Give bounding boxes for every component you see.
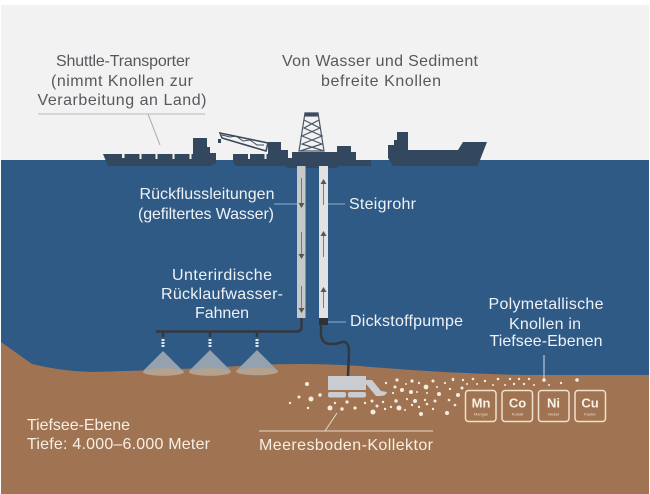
ship: right vessel xyxy=(388,132,487,166)
element: Co: Kobalt xyxy=(512,412,524,416)
element: Co xyxy=(502,390,532,422)
element: Co: Co xyxy=(509,396,526,410)
element: Cu: Cu xyxy=(581,396,599,410)
ship: shuttle transporter xyxy=(103,138,216,166)
label: freed nodules: befreite Knollen xyxy=(321,73,441,90)
plume 1 xyxy=(143,339,184,376)
label: plumes: Rücklaufwasser- xyxy=(161,286,283,303)
label: freed nodules: Von Wasser und Sediment xyxy=(282,53,479,70)
label: shuttle transporter xyxy=(38,53,206,145)
element: Mn: Mn xyxy=(472,396,490,410)
label: plumes: Fahnen xyxy=(195,305,249,322)
element: Ni: Ni xyxy=(547,396,560,410)
discharge manifold xyxy=(156,318,302,337)
crane xyxy=(218,133,268,151)
label: polymetallic nodules: Knollen in xyxy=(509,316,581,333)
label: plumes xyxy=(161,267,283,322)
slurry hose xyxy=(321,325,349,376)
label: polymetallic nodules: Tiefsee-Ebenen xyxy=(490,333,602,350)
element: Mn: Mangan xyxy=(474,412,488,416)
label: return lines: (gefiltertes Wasser) xyxy=(138,206,274,223)
platform hull xyxy=(233,142,371,168)
derrick xyxy=(299,113,324,151)
plume 2 xyxy=(189,339,231,376)
label: polymetallic nodules: Polymetallische xyxy=(488,296,604,313)
label: abyssal plain: Tiefe: 4.000–6.000 Meter xyxy=(27,436,211,453)
platform deck notches xyxy=(248,154,266,159)
return pipe xyxy=(297,166,306,318)
seabed collector xyxy=(328,376,387,398)
label: seabed collector xyxy=(259,413,434,454)
sky background xyxy=(1,5,649,165)
label: return lines xyxy=(138,186,297,223)
seabed xyxy=(1,342,649,494)
label: freed nodules xyxy=(282,53,479,90)
label: shuttle transporter: (nimmt Knollen zur xyxy=(51,73,194,90)
label: return lines: Rückflussleitungen xyxy=(140,186,274,203)
label: abyssal plain xyxy=(27,417,211,453)
label: riser: Steigrohr xyxy=(349,196,417,213)
label: plumes: Unterirdische xyxy=(172,267,272,284)
label: seabed collector: Meeresboden-Kollektor xyxy=(259,437,434,454)
label: shuttle transporter: Shuttle-Transporter xyxy=(56,53,191,70)
element: Cu xyxy=(575,390,606,422)
sea xyxy=(1,160,649,385)
label: polymetallic nodules xyxy=(488,296,604,381)
riser pipe xyxy=(319,166,328,325)
label: abyssal plain: Tiefsee-Ebene xyxy=(27,417,130,434)
label: shuttle transporter: Verarbeitung an Land) xyxy=(38,92,206,109)
plume 3 xyxy=(236,339,278,375)
element: Cu: Kupfer xyxy=(584,412,597,416)
element: Ni: Nickel xyxy=(548,412,559,416)
element: Mn xyxy=(466,390,496,422)
element: Ni xyxy=(538,390,569,422)
label: slurry pump: Dickstoffpumpe xyxy=(350,313,463,330)
nodules field xyxy=(289,378,579,416)
